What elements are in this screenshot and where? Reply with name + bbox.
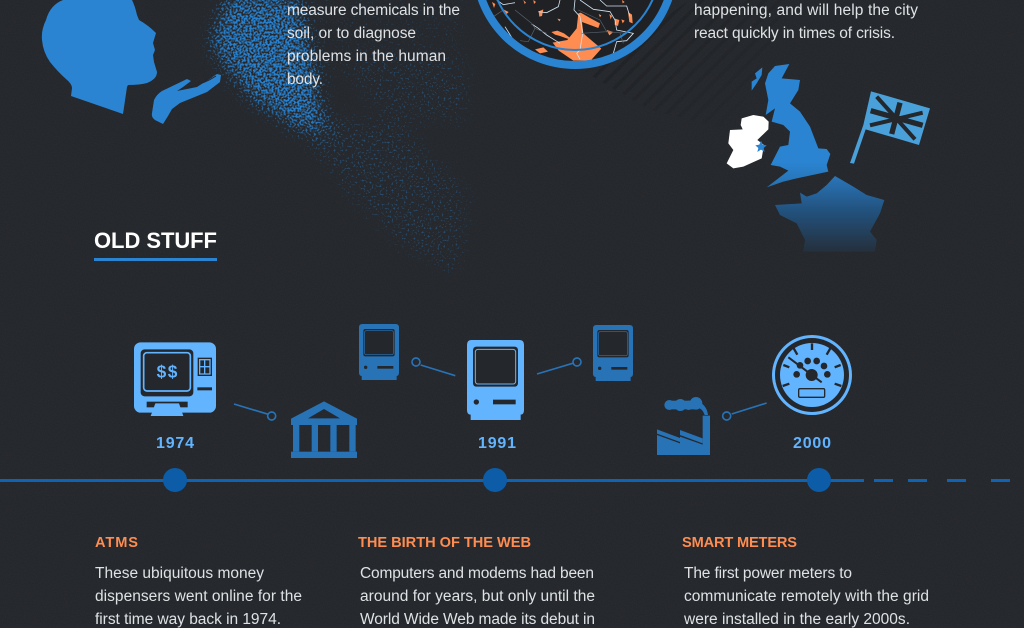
icon: main computer [467,340,524,420]
text block: smart meters: communicate remotely with the grid [684,588,929,605]
France [775,176,884,252]
thick outer ring [476,0,674,65]
year: 2000: 2000 [793,435,831,452]
icon: ATM [134,342,216,416]
open hand [152,74,221,124]
heading: old stuff: OLD STUFF [94,228,217,253]
Ireland [727,115,769,168]
icon: bank [291,401,357,458]
globe map of the city [476,0,674,65]
Great Britain [765,64,830,187]
connector: right computer [537,358,581,374]
text block: city crisis response: happening, and will help the city [694,2,918,19]
text block: sensor description [287,2,460,88]
text block: city crisis response [694,2,918,42]
text block: the birth of the web: Computers and modems had been [360,565,594,582]
icon: factory [657,397,710,455]
text block: the birth of the web [358,535,595,628]
text block: smart meters [682,535,929,628]
connector: ATM to bank [234,404,276,420]
icon: ATM: $$ [157,362,178,382]
icon: head silhouette blowing from a hand [42,0,221,124]
year: 1974: 1974 [156,435,194,452]
text block: ATMs: These ubiquitous money [95,565,264,582]
text block: smart meters: were installed in the early 2000s. [683,611,910,628]
text block: smart meters: SMART METERS [682,535,797,551]
text block: sensor description: measure chemicals in the [287,2,460,19]
text block: sensor description: soil, or to diagnose [287,25,416,42]
orange urban areas and white roads [492,0,633,61]
text block: ATMs: first time way back in 1974. [95,611,281,628]
year: 1991: 1991 [478,435,516,452]
star marking Dublin [755,141,767,152]
text block: ATMs: dispensers went online for the [95,588,302,605]
timeline [0,468,1010,492]
text block: city crisis response: react quickly in times of crisis. [694,25,895,42]
text block: sensor description: problems in the human [287,48,446,65]
hatched shadow of the globe [585,0,790,130]
thin inner ring [490,0,660,50]
text block: ATMs [95,535,302,628]
connector: left computer [412,358,455,376]
icon: small computer right [593,325,633,381]
icon: small computer left [359,324,399,380]
text block: smart meters: The first power meters to [684,565,852,582]
text block: sensor description: body. [287,71,323,88]
particle cloud of exhaled dust [0,0,1024,400]
text block: the birth of the web: THE BIRTH OF THE WEB [358,535,531,551]
text block: the birth of the web: around for years, but only until the [360,588,595,605]
text block: ATMs: ATMS [95,535,138,551]
icon: smart meter gauge [772,335,852,415]
map of UK, Ireland and France [727,64,884,252]
head silhouette [42,0,157,114]
text block: the birth of the web: World Wide Web made its debut in [360,611,595,628]
icon: Union Jack flag [850,91,930,164]
connector: factory to meter [723,403,767,420]
